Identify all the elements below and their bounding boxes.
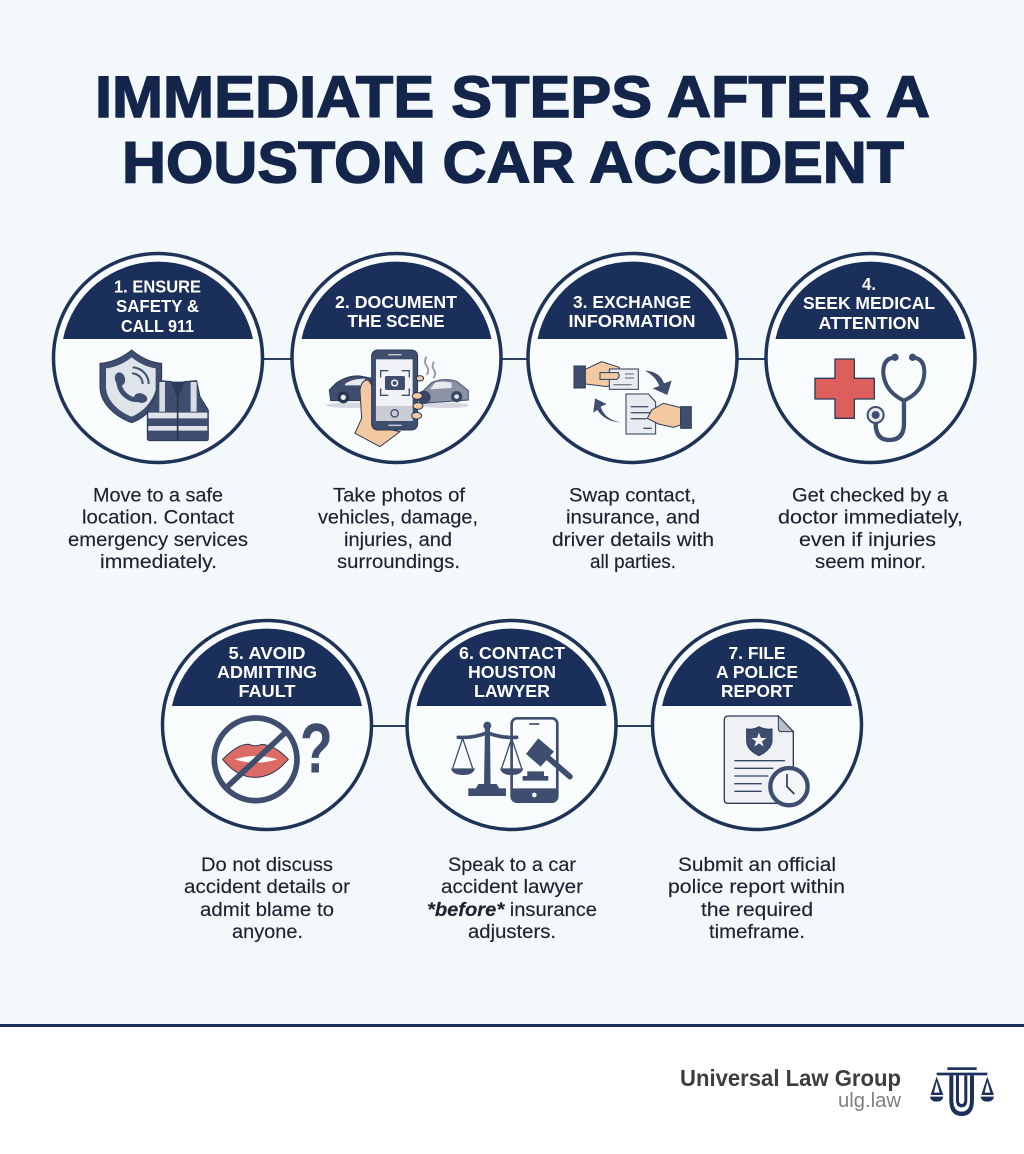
heading: step 5: FAULT bbox=[238, 681, 296, 701]
heading: step 1: CALL 911 bbox=[121, 316, 194, 336]
text: step 5 description: accident details or bbox=[184, 877, 351, 898]
panel: step 6 bbox=[407, 620, 616, 830]
icon: crossed-out lips and question mark: ? bbox=[300, 709, 333, 788]
heading: step 7 bbox=[716, 643, 798, 701]
panel: step 4 bbox=[766, 254, 975, 462]
heading: step 1: SAFETY & bbox=[116, 296, 199, 316]
text: step 1 description: location. Contact bbox=[82, 508, 235, 528]
text: step 7 description: the required bbox=[701, 900, 813, 921]
text: step 6 description: accident lawyer bbox=[441, 877, 584, 898]
icon: medical cross and stethoscope bbox=[815, 354, 924, 440]
text: step 1 description: immediately. bbox=[100, 552, 217, 573]
title: HOUSTON CAR ACCIDENT bbox=[122, 130, 904, 196]
heading: step 4: SEEK MEDICAL bbox=[803, 293, 935, 313]
footer bbox=[0, 1024, 1024, 1154]
text: step 6 description: *before* insurance bbox=[427, 900, 597, 921]
text: step 5 description: Do not discuss bbox=[201, 855, 333, 876]
icon: scales, phone and gavel bbox=[451, 718, 570, 802]
heading: step 6: 6. CONTACT bbox=[459, 643, 565, 663]
heading: step 3: INFORMATION bbox=[568, 311, 696, 331]
banner: step 1 bbox=[63, 262, 253, 339]
heading: step 5: 5. AVOID bbox=[228, 643, 306, 663]
text: step 5 description bbox=[184, 855, 351, 943]
heading: step 6 bbox=[459, 643, 565, 701]
heading: step 6: HOUSTON bbox=[468, 662, 556, 682]
icon: firm logo bbox=[930, 1067, 994, 1116]
banner: step 7 bbox=[662, 629, 852, 706]
icon: police report document and clock bbox=[724, 716, 808, 805]
banner: step 3 bbox=[538, 262, 728, 339]
text: step 2 description: surroundings. bbox=[337, 552, 460, 573]
banner: step 5 bbox=[172, 629, 362, 706]
heading: step 5 bbox=[217, 643, 317, 701]
text: step 3 description: Swap contact, bbox=[569, 486, 696, 506]
text: step 2 description bbox=[318, 486, 478, 573]
text: step 6 description bbox=[427, 855, 597, 943]
heading: step 5: ADMITTING bbox=[217, 662, 317, 682]
title: IMMEDIATE STEPS AFTER A bbox=[95, 65, 930, 130]
text: step 3 description: all parties. bbox=[590, 552, 676, 573]
heading: step 7: A POLICE bbox=[716, 662, 798, 682]
banner: step 2 bbox=[302, 262, 492, 339]
text: step 5 description: admit blame to bbox=[200, 900, 334, 921]
heading: step 2: 2. DOCUMENT bbox=[335, 292, 457, 312]
icon: hands exchanging card and document bbox=[574, 362, 691, 434]
connector lines bbox=[262, 359, 766, 726]
text: step 3 description: insurance, and bbox=[566, 508, 700, 528]
heading: step 7: REPORT bbox=[721, 681, 793, 701]
text: step 2 description: vehicles, damage, bbox=[318, 508, 478, 528]
heading: step 1: 1. ENSURE bbox=[114, 276, 201, 296]
text: step 7 description: police report within bbox=[668, 877, 845, 898]
heading: step 2 bbox=[335, 292, 457, 331]
title bbox=[95, 65, 930, 196]
text: step 3 description: driver details with bbox=[552, 530, 714, 551]
brand name: Universal Law Group bbox=[680, 1065, 901, 1091]
text: step 3 description bbox=[552, 486, 714, 573]
text: step 6 description: Speak to a car bbox=[448, 855, 577, 876]
text: step 6 description: adjusters. bbox=[468, 922, 556, 943]
heading: step 4 bbox=[803, 274, 935, 333]
text: step 4 description: even if injuries bbox=[799, 530, 936, 551]
text: step 2 description: injuries, and bbox=[344, 530, 452, 551]
heading: step 4: ATTENTION bbox=[818, 313, 920, 333]
heading: step 2: THE SCENE bbox=[348, 311, 444, 331]
panel: step 7 bbox=[652, 620, 862, 830]
panel: step 1 bbox=[54, 254, 262, 462]
icon: shield with phone and safety vest bbox=[100, 350, 208, 441]
text: step 4 description: seem minor. bbox=[815, 552, 926, 573]
brand url: ulg.law bbox=[838, 1090, 902, 1112]
text: step 1 description bbox=[68, 486, 248, 573]
text: step 7 description: timeframe. bbox=[709, 922, 805, 943]
text: step 1 description: Move to a safe bbox=[93, 486, 223, 506]
heading: step 1 bbox=[114, 276, 201, 336]
heading: step 3 bbox=[568, 292, 696, 331]
icon: crossed-out lips and question mark bbox=[214, 709, 333, 801]
text: step 4 description: Get checked by a bbox=[792, 486, 948, 506]
text: step 4 description: doctor immediately, bbox=[778, 508, 963, 528]
icon: phone photographing car crash bbox=[326, 350, 469, 447]
banner: step 6 bbox=[416, 629, 606, 706]
heading: step 4: 4. bbox=[862, 274, 876, 294]
text: step 7 description: Submit an official bbox=[678, 855, 836, 876]
heading: step 6: LAWYER bbox=[474, 681, 550, 701]
panel: step 2 bbox=[292, 254, 501, 462]
text: step 4 description bbox=[778, 486, 963, 573]
text: step 7 description bbox=[668, 855, 845, 943]
text: step 1 description: emergency services bbox=[68, 530, 248, 551]
heading: step 7: 7. FILE bbox=[728, 643, 786, 663]
panel: step 5 bbox=[162, 620, 372, 830]
heading: step 3: 3. EXCHANGE bbox=[573, 292, 691, 312]
banner: step 4 bbox=[776, 262, 966, 339]
panel: step 3 bbox=[528, 254, 737, 462]
text: step 2 description: Take photos of bbox=[333, 486, 466, 506]
text: step 5 description: anyone. bbox=[232, 922, 303, 943]
